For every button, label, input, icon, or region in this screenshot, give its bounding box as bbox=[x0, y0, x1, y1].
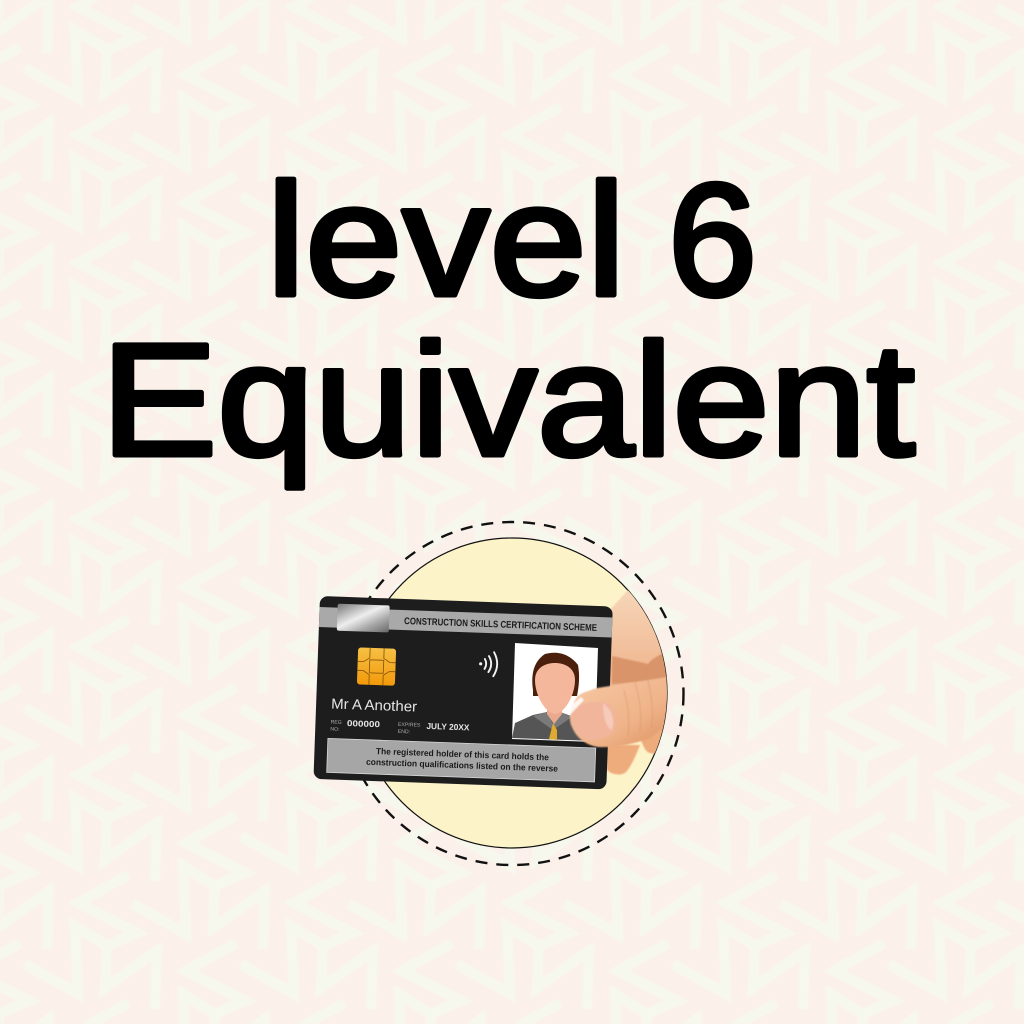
reg no bbox=[330, 719, 342, 733]
card: 000000 bbox=[347, 718, 380, 729]
reg no: REG bbox=[330, 719, 342, 726]
chip bbox=[357, 647, 396, 686]
dashed ring bbox=[340, 522, 684, 865]
reg no: NO: bbox=[330, 726, 340, 733]
card body bbox=[313, 596, 613, 789]
bottom silver panel: construction qualifications listed on the reverse bbox=[366, 757, 558, 774]
top silver band bbox=[319, 607, 612, 637]
title: level bbox=[266, 150, 626, 329]
expiry: END: bbox=[398, 729, 410, 735]
hologram bbox=[337, 604, 390, 632]
title bbox=[101, 150, 915, 489]
bottom silver panel: The registered holder of this card holds the bbox=[376, 746, 549, 762]
cardholder name: Mr A Another bbox=[331, 696, 418, 716]
ID photo bbox=[512, 643, 598, 742]
scheme name: CONSTRUCTION SKILLS CERTIFICATION SCHEME bbox=[404, 616, 598, 634]
expiry bbox=[398, 722, 421, 736]
yellow circle bbox=[357, 538, 667, 848]
bottom silver panel bbox=[327, 738, 596, 782]
title: 6 bbox=[668, 150, 757, 329]
title: Equivalent bbox=[101, 310, 915, 489]
hand: fingers behind the card bbox=[607, 590, 667, 776]
card: JULY 20XX bbox=[426, 721, 470, 732]
illustration: hand holding CSCS card bbox=[313, 522, 684, 865]
card bbox=[313, 596, 613, 789]
thumb bbox=[568, 676, 667, 748]
contactless icon bbox=[479, 652, 498, 676]
expiry: EXPIRES bbox=[398, 722, 421, 729]
